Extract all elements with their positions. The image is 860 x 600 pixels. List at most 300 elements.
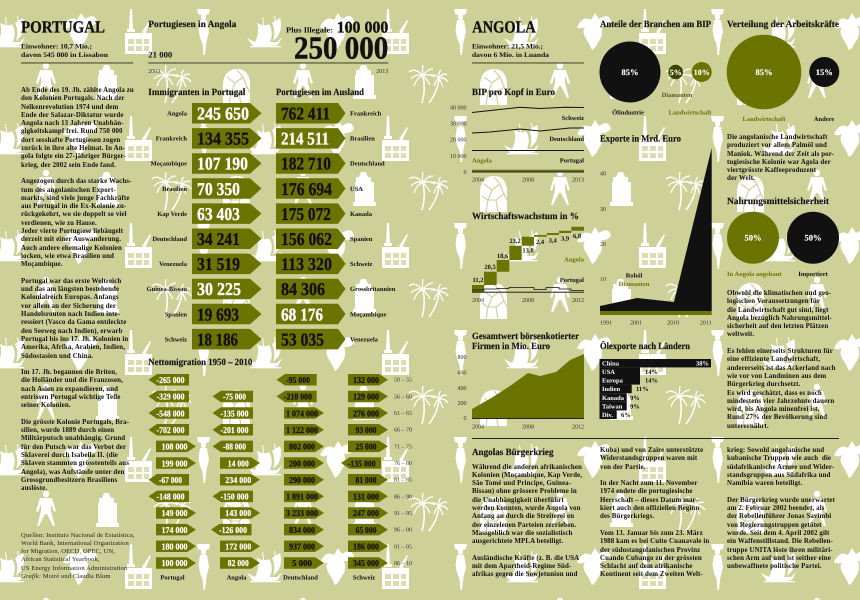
bar Indien: 11% [636,386,649,393]
column Deutschland: 1 122 000 [286,425,318,435]
row Grossbritannien: 84 306 [281,279,325,299]
text block: Bürgerkrieg column 1: Anfang an durch die Streiterei en [472,513,574,520]
row Moçambique [276,304,387,324]
row Venezuela: Venezuela [350,336,379,343]
years: 2004 [472,298,484,304]
Portugal population [21,44,108,59]
bar Europa: 14% [645,378,658,385]
heading: Firmen in Mio. Euro [472,342,550,352]
row Frankreich: 134 355 [197,129,249,149]
row Moçambique: 68 176 [281,304,323,324]
column Deutschland: 937 000 [289,542,315,552]
text block: Bürgerkrieg column 1: die Unabhängigkeit überführt [472,497,564,504]
axis labels: 0 [464,170,466,176]
value labels: 18,6 [497,253,509,260]
row Deutschland: Deutschland [350,161,385,168]
row Angola [167,103,262,124]
text block: Portugal history: dort sesshafte Portugiesen zogen [21,137,120,144]
text block: Landwirtschaft: produziert vor allem Palmöl und [727,142,827,149]
row Kap Verde [157,203,262,224]
row Venezuela [159,254,262,274]
text block: Portugal history: Kolonialreich Europas. Anfangs [21,294,119,301]
years: 2008 [522,424,534,430]
text block: Portugal history: Moçambique. [21,261,63,268]
text block: Bürgerkrieg column 3: unbewaffnete politische Partei. [727,563,822,570]
row Grossbritannien [276,279,396,299]
column Angola: -150 000 [220,492,249,502]
years [472,424,584,430]
axis labels: 10 000 [450,154,466,160]
text block: Portugal history: verdienen, wie zu Hause. [21,220,97,227]
column Angola: 172 000 [225,542,252,552]
heading: Verteilung der Arbeitskräfte [727,20,839,30]
text block: Portugal history: Sklaverei durch Isabella II. (die [21,452,118,459]
row Guinea-Bissau: Guinea-Bissau [147,286,187,293]
axis labels: 10 [600,277,606,283]
text block: Portugal history: für den Putsch war das Verbot der [21,444,126,451]
row Spanien: Spanien [165,311,187,318]
text block: Bürgerkrieg column 3: truppe UNITA löste ihren militäri- [727,547,833,554]
bar Kanada [600,393,640,402]
row Frankreich: 762 411 [281,104,330,124]
axis labels: 400 [458,386,466,392]
text block: Bürgerkrieg column 3: schen Arm auf und ist seither eine [727,555,831,562]
column Deutschland: 1 074 000 [286,408,318,418]
period labels: 96 – 00 [394,528,412,534]
text block: Portugal history: seiner Kolonien. [21,402,71,409]
years: 2001 [630,320,642,326]
text block: Portugal history: nach Asien zu expandieren, und [21,386,118,393]
text block: Nahrungsmittelsicherheit: sicherheit auf den letzten Plätzen [727,323,828,330]
row Kap Verde: Kap Verde [157,211,187,218]
text block: Bürgerkrieg column 2: 1988 kam es bei Cuito Cuanavale in [600,538,709,545]
text block: Portugal history: Ende der Salazar-Diktatur wurde [21,112,124,119]
column Portugal [148,374,196,582]
value labels: 6,8 [573,233,582,240]
text block: Bürgerkrieg column 3: der Rebellenführer Jonas Savimbi [727,513,831,520]
text block: Bürgerkrieg column 3: krieg: Sowohl angolanische und [727,447,824,454]
sources [21,532,135,580]
axis labels: 30 000 [450,122,466,128]
column Portugal: -548 000 [156,408,185,418]
text block: Portugal history: gola folgte ein 27-jähriger Bürger- [21,153,126,160]
labels: Ölindustrie [612,108,644,116]
circle Landwirtschaft: 85% [756,67,772,77]
panel: Nahrungsmittelsicherheit [727,197,839,278]
labels [612,92,712,116]
text block: Landwirtschaft [727,134,834,182]
row Frankreich [276,103,382,124]
text block: Nahrungsmittelsicherheit: wie vor von Landminen aus dem [727,373,826,380]
text block: Portugal history: vor allem an der Sicherung der [21,303,116,310]
text block: Nahrungsmittelsicherheit: Es wird geschätzt, dass es noch [727,390,822,397]
labels: Landwirtschaft [743,116,786,123]
text block: Portugal history: ressiert (Vasco da Gama entdeckte [21,319,126,326]
text block: Bürgerkrieg column 2: Kuba) und von Zaire unterstützte [600,447,703,454]
line Schweiz [472,107,584,112]
panel: Portugiesen im Ausland [276,88,396,349]
text block: Portugal history: Die grösste Kolonie Portugals, Bra- [21,419,129,426]
column Angola: -126 000 [219,525,247,535]
column Angola [211,391,260,582]
row Brasilien [276,128,375,149]
row Venezuela: 31 519 [197,254,240,274]
text block: Portugal history: den Kolonien Portugals. Nach der [21,95,125,102]
text block: Nahrungsmittelsicherheit: Bürgerkrieg durchsetzt. [727,381,800,388]
row Brasilien: 70 350 [197,179,240,199]
title: Angola: ANGOLA [472,18,536,36]
text block: Bürgerkrieg column 2 [600,446,710,578]
value 2013: 250 000 [294,29,388,65]
labels: Diamanten [662,92,693,99]
axis labels: 40 000 [450,106,466,112]
row Angola: 245 650 [197,104,249,124]
text block: Bürgerkrieg column 2: Kontinent seit dem Zweiten Welt- [600,571,703,578]
text block: Bürgerkrieg column 3: kubanische Truppen wie auch die [727,455,831,462]
axis labels: 20 [600,242,606,248]
text block: Bürgerkrieg column 3: von Regierungstruppen getötet [727,522,822,529]
row Kap Verde: 63 403 [197,204,240,224]
column Schweiz: 345 000 [353,558,379,568]
text block: Nahrungsmittelsicherheit: eine effiziente Landwirtschaft, [727,356,820,363]
text block: Portugal history: Grossgrundbesitzern Brasiliens [21,477,117,484]
column Schweiz: 132 000 [353,375,379,385]
illegal value: 100 000 [337,18,388,37]
text block: Portugal history: zurück in ihre alte Heimat. In An- [21,145,125,152]
row Spanien [276,228,373,249]
column Schweiz: 247 000 [353,508,379,518]
rule under Portugal title [21,62,133,64]
column Schweiz: 81 000 [356,475,377,485]
text block: Bürgerkrieg column 1: Massgeblich war die sozialistisch [472,530,572,537]
year 2013: 2013 [376,69,388,75]
text block: Landwirtschaft: der Welt. [727,175,755,182]
text block: Portugal history: tum des angolanischen Export- [21,187,116,194]
column Schweiz: 93 000 [356,425,377,435]
panel: Nettomigration [148,358,412,582]
text block: Portugal history: aus Portugal in die Ex-Kolonie zu- [21,203,126,210]
bar USA: USA [602,369,615,376]
heading: Exporte in Mrd. Euro [600,134,681,144]
text block: Nahrungsmittelsicherheit: Angola bezüglich Nahrungsmittel- [727,315,832,322]
circle Landwirtschaft: 10% [694,68,710,77]
row Deutschland [276,153,385,174]
column Deutschland: -95 000 [286,375,310,385]
column Schweiz [341,374,388,582]
circle Importiert: 50% [804,233,822,243]
timeline rule [148,62,388,64]
period labels: 76 – 80 [394,461,412,467]
text block: Bürgerkrieg column 2: In der Nacht zum 11. November [600,480,698,487]
column Schweiz: 131 000 [353,492,379,502]
bar Indien [600,385,649,393]
text block: Portugal history: krieg, der 2002 sein Ende fand. [21,162,116,169]
row Frankreich: Frankreich [156,136,187,143]
text block: Bürgerkrieg column 1: der einzelenen Parteien zerrieben. [472,522,576,529]
column Angola: 82 000 [228,558,249,568]
value labels [472,233,582,284]
baseline [472,417,584,420]
series labels: Angola [472,157,493,164]
text block: Portugal history: derzeit mit einer Auswanderung. [21,236,121,243]
years: 2012 [572,424,584,430]
column Angola: 234 000 [225,475,252,485]
axis labels: 200 [458,401,466,407]
text block: Nahrungsmittelsicherheit: wird, bis Angola minenfrei ist. [727,406,819,413]
column Angola: Angola [227,574,247,582]
text block: Portugal history: Nelkenrevolution 1974 und dem [21,104,118,111]
row Guinea-Bissau [147,279,262,299]
bar Div. [600,410,631,419]
text block: Nahrungsmittelsicherheit: weltweit. [727,331,754,338]
axis labels: 0 [464,416,466,422]
sources: US Energy Information Administration [21,565,127,572]
circle In Angola angebaut: 50% [744,233,762,243]
heading: BIP pro Kopf in Euro [472,88,555,98]
row Spanien: 19 693 [197,304,239,324]
column Angola: 14 000 [228,458,249,468]
row Schweiz: 18 186 [197,329,238,349]
row Kanada: Kanada [350,211,373,218]
column Angola: 143 000 [225,508,252,518]
column Portugal: 199 000 [162,458,188,468]
row Spanien: 156 062 [281,229,332,249]
year 2003: 2003 [148,69,160,75]
row Angola: Angola [167,110,188,118]
axis labels: 40 [600,172,606,178]
axis labels [600,172,606,283]
row Frankreich [156,128,262,149]
text block: Portugal history: auslöste. [21,485,47,492]
period labels: 01 – 05 [394,544,412,550]
Angola population [472,44,550,59]
labels: Landwirtschaft [669,109,712,116]
period labels [394,378,412,567]
text block: Bürgerkrieg column 3: standsgruppen aus Südafrika und [727,472,830,479]
column Portugal: -702 000 [156,425,185,435]
text block: Nahrungsmittelsicherheit: Rund 27% der Bevölkerung sind [727,414,827,421]
text block: Bürgerkrieg column 2: der südostangolanischen Provinz [600,547,700,554]
labels: In Angola angebaut [727,271,782,278]
text block: Portugal history: Portugal bis ins 17. Jh. Kolonien in [21,336,128,343]
row USA [276,178,363,199]
column Deutschland: 802 000 [289,442,315,452]
heading: Ölexporte nach Ländern [600,341,691,352]
row Moçambique: Moçambique [350,311,387,318]
series labels: Diamanten [619,281,650,288]
column Angola: -201 000 [220,425,249,435]
value labels: 11,2 [472,277,484,284]
text block: Portugal history: rückgekehrt, wo sie doppelt so viel [21,211,127,218]
area [472,354,584,418]
text block: Nahrungsmittelsicherheit: logischen Voraussetzungen für [727,298,820,305]
column Portugal: 180 000 [162,542,188,552]
bar China: 38% [696,360,709,368]
column Deutschland: Deutschland [283,574,318,582]
bar Taiwan: 9% [630,403,640,410]
panel: Immigranten in Portugal [147,88,262,349]
series labels: Angola [564,256,585,264]
value labels: 23,2 [509,238,521,245]
text block: Portugal history [21,87,134,492]
row Moçambique: 107 190 [197,154,248,174]
text block: Bürgerkrieg column 1: São Tomé und Principe, Guinea- [472,480,571,487]
column Portugal: 108 000 [162,442,188,452]
years: 2004 [472,178,484,184]
title: Portugal: PORTUGAL [21,18,105,36]
row Schweiz [165,329,262,349]
column Portugal: 174 000 [162,525,188,535]
column Deutschland: 3 233 000 [286,508,318,518]
row Schweiz: Schweiz [350,261,372,268]
row Brasilien [162,178,262,199]
row Moçambique [151,153,262,174]
sources: African Statistical Yearbook, [21,556,100,563]
text block: Nahrungsmittelsicherheit: Obwohl die klimatischen und geo- [727,290,831,297]
text block: Portugal history: Militärputsch unabhängig. Grund [21,435,125,442]
column Schweiz: 129 000 [353,392,379,402]
column Schweiz: 65 000 [356,525,377,535]
text block: Portugal history: die Holländer und die Franzosen, [21,377,123,384]
bar China: China [602,360,620,368]
column Schweiz: 186 000 [353,542,379,552]
bar Kanada: 9% [630,395,640,402]
text block: Portugal history: Im 17. Jh. begannen die Briten, [21,369,117,376]
period labels: 91 – 95 [394,511,412,517]
years: 1991 [600,320,612,326]
text block: Landwirtschaft: Die angolanische Landwirtschaft [727,134,828,141]
row Moçambique: Moçambique [151,161,187,168]
text block: Portugal history: markts, sind viele junge Fachkräfte [21,195,130,202]
text block: Portugal history: Angola nach 13 Jahren Unabhän- [21,120,124,127]
text block: Landwirtschaft: Maniok. Während der Zeit als por- [727,151,834,158]
text block: Bürgerkrieg column 3: wurde. Seit dem 4. April 2002 gilt [727,530,829,537]
text block: Portugal history: Portugal war das erste Weltreich [21,278,121,285]
row Schweiz [276,254,372,274]
years: 2008 [522,178,534,184]
axis labels: 30 [600,207,606,213]
column Schweiz: -135 000 [348,458,376,468]
band Angola [472,170,584,172]
bar Div.: 6% [621,412,631,419]
heading: Gesamtwert börsenkotierter [472,332,580,342]
column Deutschland: 1 891 000 [286,492,318,502]
text block: Bürgerkrieg column 1: werden konnten, wurde Angola von [472,505,581,512]
column Deutschland: 834 000 [289,525,315,535]
column Angola: -135 000 [220,408,249,418]
period labels: 61 – 65 [394,411,412,417]
text block: Bürgerkrieg column 3: südafrikanische Armee und Wider- [727,464,834,471]
sources: for Migration, OECD, OPEC, UN, [21,548,115,555]
row USA: USA [350,186,363,193]
text block: Landwirtschaft: viertgrösste Kaffeeproduzent [727,167,816,174]
Portugal population: Einwohner: 10,7 Mio.; [21,44,92,50]
row Schweiz: 113 320 [281,254,332,274]
Portugal line [472,288,584,290]
text block: Portugal history: Angezogen durch das starke Wachs- [21,178,132,185]
text block: Portugal history: Jeder vierte Portugiese liebäugelt [21,228,123,235]
series labels [472,115,584,164]
axis labels: 600 [458,370,466,376]
labels [743,116,834,123]
text block: Bürgerkrieg column 2: 1974 endete die portugiesische [600,488,693,495]
period labels: 86 – 90 [394,494,412,500]
heading: Nettomigration 1950 – 2010 [148,358,253,368]
text block: Portugal history: gigkeitskampf frei. Rund 750 000 [21,128,123,135]
series labels [560,256,585,284]
column Angola: -88 000 [223,442,246,452]
text block: Portugal history: Auch andere ehemalige Kolonien [21,245,122,252]
text block: Bürgerkrieg column 1: Während die anderen afrikanischen [472,464,582,471]
row Brasilien: Brasilien [162,186,187,193]
series labels: Rohöl [626,272,642,279]
labels: Andere [814,116,834,123]
row Venezuela: Venezuela [159,261,188,268]
column Portugal: -67 000 [159,475,182,485]
years: 2013 [572,178,584,184]
chart: Ölexporte nach Ländern [600,341,711,419]
panel: Portugiesen in Angola [148,18,388,75]
column Portugal: 100 000 [162,558,188,568]
sources: World Bank, International Organization [21,540,129,547]
area Diamanten [600,311,712,315]
text block: Bürgerkrieg column 2: Cuando Cubango zu der grössten [600,555,702,562]
series labels: Schweiz [562,115,584,122]
text block: Bürgerkrieg column 1 [472,464,582,578]
text block: Bürgerkrieg column 2: kiert auch den offiziellen Beginn [600,505,699,512]
labels: Importiert [798,271,829,278]
value labels: 20,5 [484,264,496,271]
illegal label: Plus Illegale: [286,26,333,34]
rule under Angola title [472,62,584,64]
axis labels [458,355,466,422]
column Portugal: -148 000 [156,492,185,502]
column Portugal: -265 000 [156,375,185,385]
years: 2012 [572,298,584,304]
value labels: 2,4 [536,239,545,246]
section rule [472,438,839,439]
text block: Bürgerkrieg column 1: Bissau) ohne grössere Probleme in [472,488,577,495]
years: 2008 [522,298,534,304]
value 2003: 21 000 [148,49,172,59]
heading [472,332,580,352]
column Schweiz: 276 000 [353,408,379,418]
bar USA [600,367,658,376]
text block: Nahrungsmittelsicherheit: die Landwirtschaft gut sind, liegt [727,307,829,314]
text block: Portugal history: Südostasien und China. [21,352,93,360]
text block: Portugal history: Angola), was Aufstände unter den [21,469,124,476]
text block: Portugal history: Sklaven stammten grösstenteils aus [21,460,129,467]
heading: Anteile der Branchen am BIP [600,20,711,30]
years: 2004 [472,424,484,430]
heading: Portugiesen im Ausland [276,88,365,98]
text block: Bürgerkrieg column 1: mit dem Apartheid-Regime Süd- [472,563,571,570]
bar Div.: Div. [602,412,613,419]
bar Kanada: Kanada [602,395,625,402]
row Brasilien: 214 511 [281,129,329,149]
column Deutschland: 200 000 [289,458,315,468]
text block: Portugal history: entrissen Portugal wichtige Teile [21,394,120,401]
text block: Nahrungsmittelsicherheit: andererseits ist das Ackerland nach [727,365,836,372]
column Deutschland: 5 000 [292,558,312,568]
row Kanada [276,203,373,224]
text block: Portugal history: Handelsrouten nach Indien inte- [21,311,120,318]
row USA: 176 694 [281,179,332,199]
text block: Bürgerkrieg column 1: Kolonien (Moçambique, Kap Verde, [472,472,582,479]
text block: Bürgerkrieg column 3: am 2. Februar 2002 beendet, als [727,505,825,512]
row Guinea-Bissau: 30 225 [197,279,241,299]
sources: Grafik: Moiré und Claudia Blum [21,573,111,580]
